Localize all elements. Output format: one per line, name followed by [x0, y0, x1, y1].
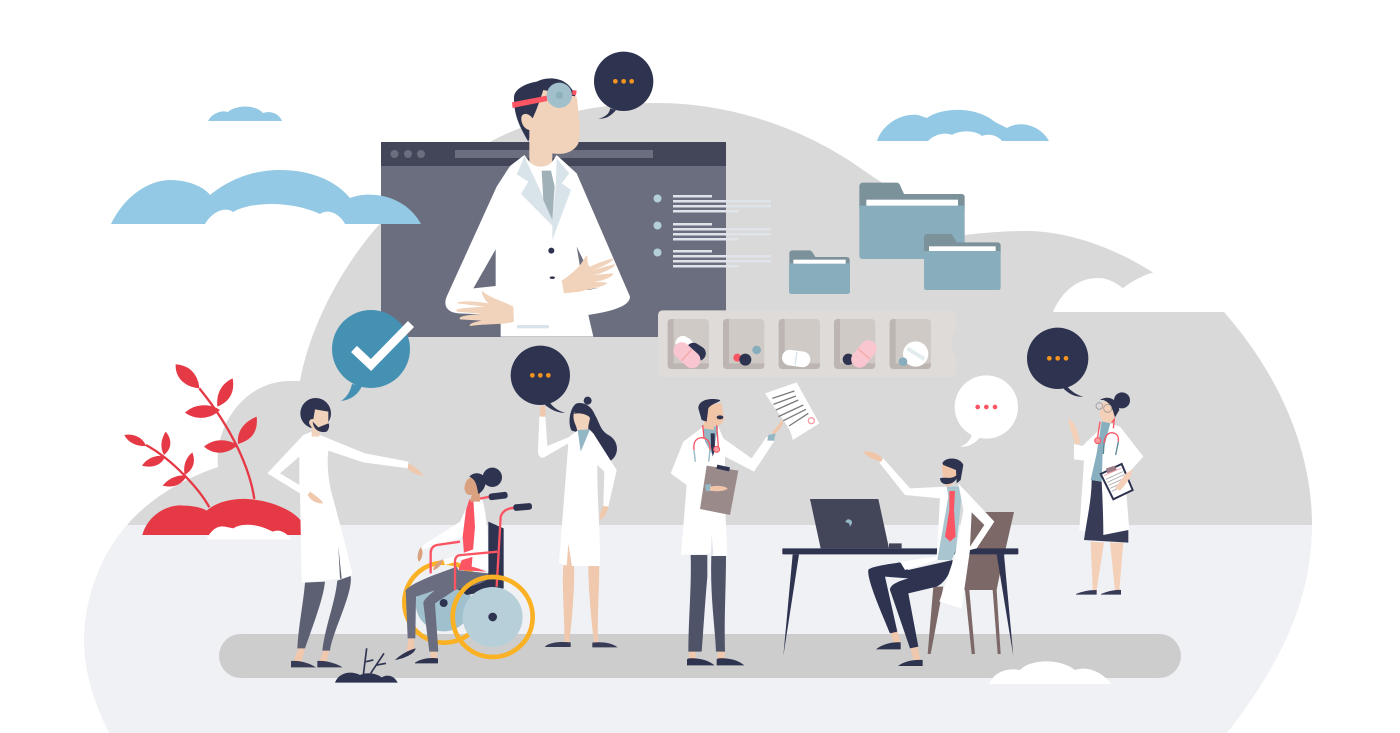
wheelchair and patient — [395, 468, 533, 663]
folder: large — [859, 183, 965, 259]
wheelchair: backrest — [457, 522, 504, 595]
speech bubble: check mark — [332, 310, 411, 401]
stethoscope — [1095, 419, 1118, 455]
compartment: tablet — [890, 319, 931, 369]
compartment: capsules — [668, 319, 709, 372]
compartment: pink capsule — [834, 319, 880, 371]
stethoscope — [694, 425, 720, 462]
person: doctor with clipboard and paper — [671, 382, 819, 665]
chair — [928, 512, 1014, 654]
light floor band — [84, 525, 1312, 733]
plant: red sprouts — [124, 364, 303, 539]
compartment: round pills — [723, 319, 764, 369]
speech bubble: white with red dots — [955, 375, 1018, 447]
ground strip — [219, 634, 1181, 678]
table — [782, 548, 1018, 656]
browser window — [381, 142, 726, 337]
gray cloud backdrop — [127, 103, 1312, 525]
wheelchair: handles — [488, 492, 532, 511]
speech bubble: female doctor — [1027, 328, 1088, 397]
document with lines — [765, 382, 819, 440]
person: nurse with long hair — [538, 397, 618, 647]
person: seated doctor — [863, 451, 994, 666]
person: female doctor with clipboard — [1068, 392, 1143, 595]
patient: torso — [418, 498, 488, 572]
speech bubble: nurse — [511, 346, 570, 413]
doctor with head mirror — [445, 78, 630, 337]
person: bearded doctor pointing — [267, 398, 423, 667]
folders — [789, 183, 1001, 294]
cloud: small blue top left — [208, 106, 282, 121]
white cloud on backdrop — [1053, 270, 1224, 312]
desk with laptop — [782, 499, 1018, 656]
window text list — [654, 194, 771, 268]
folder: medium — [924, 234, 1001, 290]
laptop — [810, 499, 902, 548]
compartment: white capsule — [779, 319, 820, 369]
bush: dark ground shrub — [335, 648, 398, 683]
clipboard — [1101, 464, 1133, 499]
patient: head — [464, 468, 502, 502]
folder: small — [789, 250, 850, 294]
patient: legs — [395, 567, 488, 663]
cloud: blue top right — [877, 110, 1049, 141]
speech bubble: top doctor — [594, 52, 653, 119]
wheelchair: front wheel — [453, 577, 533, 657]
pill organizer — [658, 310, 956, 377]
cloud: white bottom right — [989, 661, 1111, 684]
cloud: large blue left — [111, 170, 421, 224]
wheelchair: red frame — [431, 497, 515, 590]
clipboard — [700, 465, 738, 515]
wheelchair: rear wheel — [404, 563, 484, 643]
